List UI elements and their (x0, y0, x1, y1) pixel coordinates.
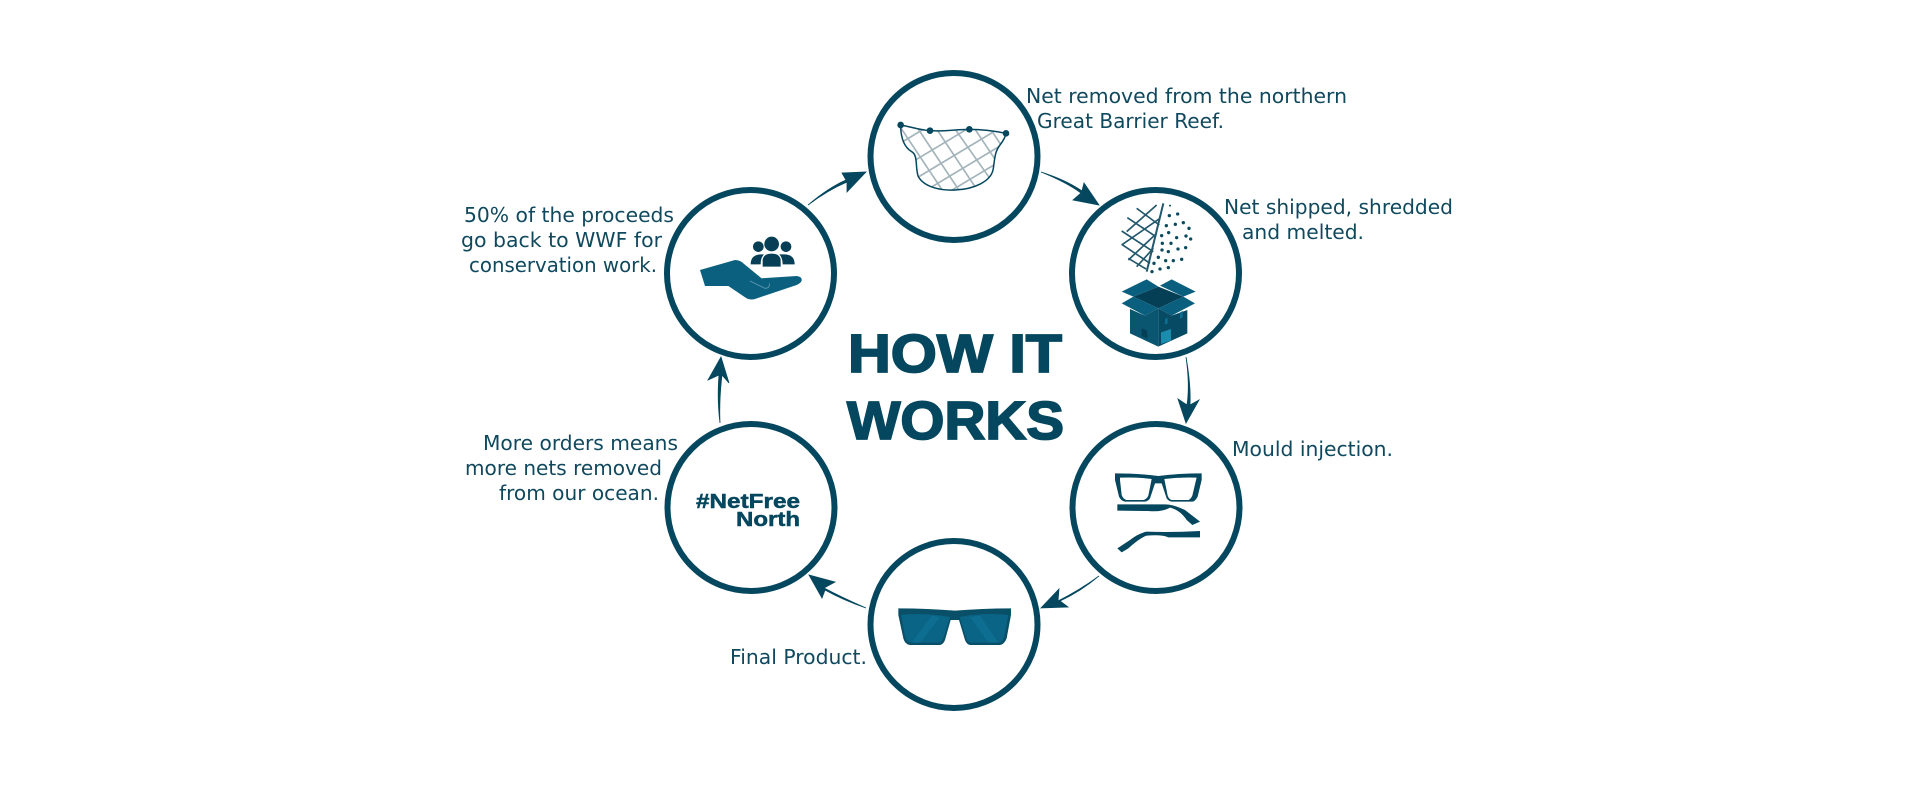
text: proceeds (461, 203, 674, 277)
icon: hand holding people (700, 237, 802, 300)
hashtag: NetFree North (696, 490, 800, 531)
arrow: proceeds to net removal (808, 172, 866, 205)
text: net removed (1026, 84, 1347, 133)
arrow: shredding to mould injection (1178, 357, 1199, 423)
infographic: how it works cycle (462, 70, 1452, 711)
text: net removed: Net removed from the northern (1026, 84, 1347, 108)
panel: net shipped (1072, 190, 1239, 357)
title: WORKS (847, 391, 1064, 451)
hashtag: NetFree North: #NetFree (696, 490, 800, 513)
text: net shipped: and melted. (1242, 220, 1364, 244)
icon: sunglasses (898, 608, 1011, 645)
arrow: final product to more orders (809, 575, 866, 608)
hashtag: NetFree North: North (736, 508, 800, 531)
panel: net removed (870, 73, 1038, 240)
text: more orders: from our ocean. (499, 481, 659, 505)
panel: final product (870, 541, 1038, 708)
title: HOW IT (848, 324, 1062, 384)
text: more orders: more nets removed (465, 456, 662, 480)
text: more orders (465, 431, 678, 505)
icon: fishing net (897, 122, 1010, 193)
arrow: more orders to proceeds (708, 357, 729, 423)
text: net shipped (1224, 195, 1453, 244)
text: net shipped: Net shipped, shredded (1224, 195, 1453, 219)
panel: more orders (668, 424, 834, 591)
arrow: net removal to shredding (1041, 172, 1099, 205)
text: mould injection: Mould injection. (1232, 437, 1393, 461)
icon: glasses parts (1115, 473, 1202, 552)
panel: mould injection (1072, 424, 1240, 591)
title (847, 324, 1064, 451)
panel: proceeds (667, 190, 834, 357)
text: net removed: Great Barrier Reef. (1037, 109, 1224, 133)
text: proceeds: go back to WWF for (461, 228, 663, 252)
icon: shredded net and box (1122, 203, 1196, 347)
text: final product: Final Product. (730, 645, 867, 669)
text: proceeds: 50% of the proceeds (464, 203, 674, 227)
arrow: mould injection to final product (1041, 576, 1099, 608)
text: proceeds: conservation work. (469, 253, 657, 277)
text: more orders: More orders means (483, 431, 678, 455)
